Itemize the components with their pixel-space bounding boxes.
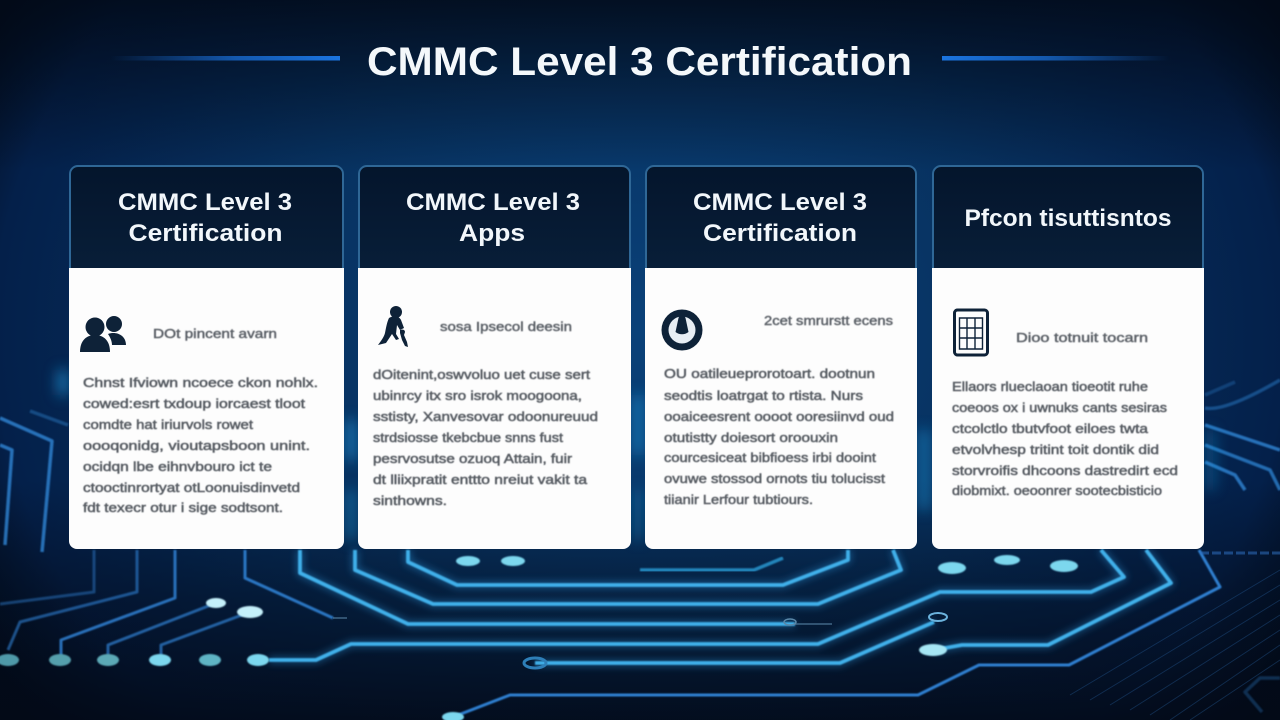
card 3 header bbox=[646, 166, 916, 268]
card 3 body text: tiianir Lerfour tubtiours. bbox=[664, 492, 813, 507]
card 2 body text: sinthowns. bbox=[373, 493, 447, 508]
card 4 body text: diobmixt. oeoonrer sootecbisticio bbox=[952, 483, 1162, 498]
card 1 heading: CMMC Level 3 bbox=[118, 189, 292, 216]
card 3 body text: otutistty doiesort oroouxin bbox=[664, 430, 838, 445]
card 1 body text: comdte hat iriurvols rowet bbox=[83, 417, 253, 432]
card 3 heading: Certification bbox=[703, 220, 857, 247]
card 4 body text: coeoos ox i uwnuks cants sesiras bbox=[952, 400, 1168, 415]
card 2 subheading: sosa Ipsecol deesin bbox=[440, 319, 572, 334]
card 3 body bbox=[645, 262, 917, 549]
card 4 body text: etvolvhesp tritint toit dontik did bbox=[952, 442, 1159, 457]
card 3 body text: OU oatileueprorotoart. dootnun bbox=[664, 366, 875, 381]
panel: card 2 bbox=[358, 166, 631, 549]
card 1 body text: ctooctinrortyat otLoonuisdinvetd bbox=[83, 480, 300, 495]
icon: bell in circle bbox=[662, 310, 702, 350]
card 4 subheading: Dioo totnuit tocarn bbox=[1016, 330, 1148, 345]
card 1 body text bbox=[83, 375, 318, 515]
card 1 body bbox=[69, 262, 344, 549]
card 2 body text: pesrvosutse ozuoq Attain, fuir bbox=[373, 451, 573, 466]
card 3 body text: ovuwe stossod ornots tiu tolucisst bbox=[664, 471, 885, 486]
card 3 heading: CMMC Level 3 bbox=[693, 189, 867, 216]
card 3 body text bbox=[664, 366, 894, 507]
card 1 heading bbox=[118, 189, 292, 247]
card 3 heading bbox=[693, 189, 867, 247]
card 2 body text: sstisty, Xanvesovar odoonureuud bbox=[373, 409, 598, 424]
card 4 body text: ctcolctlo tbutvfoot eiloes twta bbox=[952, 421, 1149, 436]
icon: people bbox=[80, 316, 126, 352]
card 3 subheading: 2cet smrurstt ecens bbox=[764, 313, 894, 328]
card 2 body bbox=[358, 262, 631, 549]
gap glows between cards bbox=[58, 370, 1215, 540]
icon: tablet grid bbox=[954, 310, 988, 355]
card 1 header bbox=[70, 166, 343, 268]
panel: card 3 bbox=[645, 166, 917, 549]
card 4 body text: storvroifis dhcoons dastredirt ecd bbox=[952, 463, 1178, 478]
card 1 body text: ocidqn lbe eihnvbouro ict te bbox=[83, 459, 272, 474]
title rule right bbox=[942, 56, 1170, 60]
card 2 body text: ubinrcy itx sro isrok moogoona, bbox=[373, 388, 582, 403]
card 2 body text: dt lliixpratit enttto nreiut vakit ta bbox=[373, 472, 588, 487]
panel: card 4 bbox=[932, 166, 1204, 549]
title rule left bbox=[110, 56, 340, 60]
card 2 header bbox=[359, 166, 630, 268]
card 2 heading: Apps bbox=[459, 220, 525, 247]
card 4 header bbox=[933, 166, 1203, 268]
ring pads bbox=[929, 613, 947, 621]
card 2 body text: strdsiosse tkebcbue snns fust bbox=[373, 430, 563, 445]
title: CMMC Level 3 Certification bbox=[367, 40, 912, 84]
card 3 body text: ooaiceesrent oooot ooresiinvd oud bbox=[664, 409, 894, 424]
card 4 body text: Ellaors rlueclaoan tioeotit ruhe bbox=[952, 379, 1148, 394]
card 2 body text: dOitenint,oswvoluo uet cuse sert bbox=[373, 367, 590, 382]
card 3 body text: courcesiceat bibfioess irbi dooint bbox=[664, 450, 876, 465]
card 4 body bbox=[932, 262, 1204, 549]
card 3 body text: seodtis loatrgat to rtista. Nurs bbox=[664, 388, 864, 403]
card 1 body text: cowed:esrt txdoup iorcaest tloot bbox=[83, 396, 305, 411]
card 2 heading: CMMC Level 3 bbox=[406, 189, 580, 216]
card 2 heading bbox=[406, 189, 580, 247]
card 4 body text bbox=[952, 379, 1178, 498]
icon: walking figure bbox=[378, 306, 408, 347]
connector pads bbox=[0, 555, 1078, 720]
card 1 heading: Certification bbox=[128, 220, 282, 247]
panel: card 1 bbox=[69, 166, 344, 549]
circuit board traces bbox=[0, 380, 1280, 720]
card 1 subheading: DOt pincent avarn bbox=[153, 326, 277, 341]
card 1 body text: fdt texecr otur i sige sodtsont. bbox=[83, 500, 283, 515]
card 2 body text bbox=[373, 367, 598, 508]
card 1 body text: Chnst Ifviown ncoece ckon nohlx. bbox=[83, 375, 318, 390]
card 4 heading: Pfcon tisuttisntos bbox=[964, 205, 1172, 232]
card 1 body text: oooqonidg, vioutapsboon unint. bbox=[83, 438, 310, 453]
